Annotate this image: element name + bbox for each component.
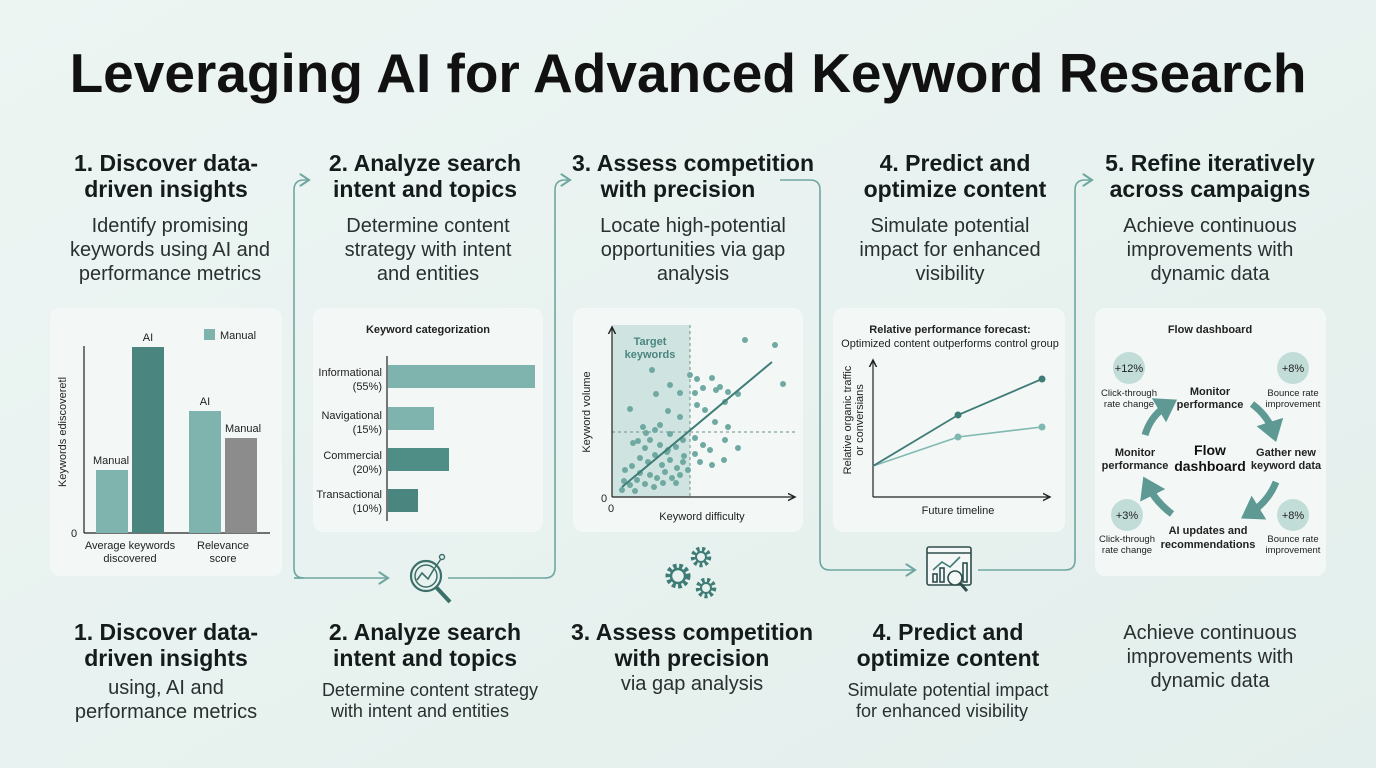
bottom text 5: Achieve continuous [1123, 622, 1297, 644]
bottom text 4: 4. Predict and [873, 619, 1023, 645]
panel: forecast line chart: Future timeline [922, 505, 994, 517]
step 1 heading: performance metrics [79, 263, 261, 285]
step 3 heading: Locate high-potential [600, 215, 786, 237]
step 1 heading [70, 150, 270, 285]
icon: magnifier with chart [411, 554, 450, 602]
bottom text 4: optimize content [857, 645, 1040, 671]
step 5 heading: Achieve continuous [1123, 215, 1297, 237]
step 3 heading: opportunities via gap [601, 239, 785, 261]
panel: keyword categorization: Navigational [321, 410, 382, 422]
panel: flow dashboard: recommendations [1161, 539, 1255, 551]
step 4 heading: impact for enhanced [859, 239, 1041, 261]
step 2 heading: and entities [377, 263, 479, 285]
panel: flow dashboard: improvement [1266, 399, 1321, 410]
step 2 heading: Determine content [346, 215, 510, 237]
bottom text 5: dynamic data [1151, 670, 1270, 692]
step 4 heading: Simulate potential [871, 215, 1029, 237]
panel: bar chart AI vs manual: Manual [220, 330, 256, 342]
panel: flow dashboard: +12% [1115, 363, 1143, 375]
panel: scatter plot: Keyword volume [581, 371, 593, 453]
panel: flow dashboard: Monitor [1190, 386, 1231, 398]
panel: forecast line chart: Optimized content outperforms control group [841, 338, 1059, 350]
step 2 heading: intent and topics [333, 176, 517, 202]
bottom text 1: performance metrics [75, 701, 257, 723]
panel: bar chart AI vs manual: AI [200, 396, 210, 408]
bottom text 3: with precision [614, 645, 769, 671]
panel: flow dashboard: keyword data [1251, 460, 1322, 472]
panel: keyword categorization: Keyword categorization [366, 324, 490, 336]
panel: keyword categorization: (15%) [353, 424, 382, 436]
panel: flow dashboard: +8% [1282, 510, 1304, 522]
bottom text 1: using, AI and [108, 677, 224, 699]
step 1 heading: Identify promising [92, 215, 248, 237]
panel: forecast line chart [833, 308, 1065, 532]
panel: bar chart AI vs manual: Relevance [197, 540, 249, 552]
step 4 heading [859, 150, 1047, 285]
panel: keyword categorization [313, 308, 543, 532]
panel: scatter plot: Target [634, 336, 667, 348]
step 2 heading: strategy with intent [345, 239, 512, 261]
panel: flow dashboard: Click-through [1099, 534, 1155, 545]
panel: flow dashboard: Gather new [1256, 447, 1316, 459]
panel: flow dashboard: dashboard [1174, 458, 1246, 474]
icon: gears [668, 549, 714, 596]
icon: dashboard with magnifier [927, 547, 971, 591]
bottom text 5: improvements with [1127, 646, 1293, 668]
step 1 heading: 1. Discover data- [74, 150, 258, 176]
bottom text 4: for enhanced visibility [856, 701, 1028, 721]
step 4 heading: optimize content [864, 176, 1047, 202]
panel: forecast line chart: Relative performance forecast: [869, 324, 1031, 336]
bottom text 4 [847, 619, 1049, 721]
bottom text 2: with intent and entities [330, 701, 509, 721]
panel: flow dashboard: Click-through [1101, 388, 1157, 399]
bottom text 3: 3. Assess competition [571, 619, 813, 645]
panel: forecast line chart: Relative organic traffic [842, 365, 854, 474]
panel: flow dashboard: rate change [1102, 545, 1152, 556]
bottom text 2: 2. Analyze search [329, 619, 521, 645]
panel: flow dashboard: performance [1102, 460, 1168, 472]
bottom text 5 [1123, 622, 1297, 692]
panel: flow dashboard: Monitor [1115, 447, 1156, 459]
panel: bar chart AI vs manual: Average keywords [85, 540, 176, 552]
bottom text 2: Determine content strategy [322, 680, 538, 700]
step 5 heading: dynamic data [1151, 263, 1270, 285]
bottom text 4: Simulate potential impact [847, 680, 1049, 700]
panel: flow dashboard: Flow [1194, 442, 1226, 458]
panel: keyword categorization: (10%) [353, 503, 382, 515]
step 5 heading [1105, 150, 1315, 285]
bottom text 2 [322, 619, 538, 721]
panel: keyword categorization: (55%) [353, 381, 382, 393]
panel: scatter plot: 0 [601, 493, 607, 505]
panel: keyword categorization: Informational [318, 367, 382, 379]
panel: flow dashboard: AI updates and [1169, 525, 1247, 537]
panel: scatter plot: keywords [625, 349, 675, 361]
panel: bar chart AI vs manual: discovered [103, 553, 157, 565]
panel: scatter plot [573, 308, 803, 532]
panel: bar chart AI vs manual: Manual [225, 423, 261, 435]
panel: bar chart AI vs manual: Keywords ediscoveretl [57, 377, 69, 487]
step 2 heading: 2. Analyze search [329, 150, 521, 176]
panel: keyword categorization: (20%) [353, 464, 382, 476]
panel: scatter plot: Keyword difficulty [659, 511, 745, 523]
step 3 heading: 3. Assess competition [572, 150, 814, 176]
panel: keyword categorization: Transactional [316, 489, 382, 501]
panel: flow dashboard: rate change [1104, 399, 1154, 410]
panel: bar chart AI vs manual: score [210, 553, 236, 565]
step 5 heading: 5. Refine iteratively [1105, 150, 1315, 176]
step 4 heading: visibility [916, 263, 984, 285]
bottom text 3 [571, 619, 813, 695]
step 1 heading: keywords using AI and [70, 239, 270, 261]
panel: flow dashboard: Flow dashboard [1168, 324, 1252, 336]
panel: flow dashboard: Bounce rate [1267, 388, 1319, 399]
panel: flow dashboard: Bounce rate [1267, 534, 1319, 545]
bottom text 1 [74, 619, 258, 723]
panel: flow dashboard: +8% [1282, 363, 1304, 375]
step 2 heading [329, 150, 521, 285]
bottom text 2: intent and topics [333, 645, 517, 671]
step 3 heading: analysis [657, 263, 729, 285]
panel: keyword categorization: Commercial [323, 450, 382, 462]
panel: scatter plot: 0 [608, 503, 614, 515]
panel: forecast line chart: or conversians [854, 384, 866, 456]
connector arrows [294, 180, 1092, 578]
step 1 heading: driven insights [84, 176, 248, 202]
step 5 heading: improvements with [1127, 239, 1293, 261]
step 3 heading: with precision [600, 176, 755, 202]
bottom text 1: driven insights [84, 645, 248, 671]
panel: flow dashboard: improvement [1266, 545, 1321, 556]
panel: bar chart AI vs manual: AI [143, 332, 153, 344]
title: Leveraging AI for Advanced Keyword Research [70, 42, 1306, 104]
panel: flow dashboard: +3% [1116, 510, 1138, 522]
panel: flow dashboard: performance [1177, 399, 1243, 411]
bottom text 3: via gap analysis [621, 673, 763, 695]
step 5 heading: across campaigns [1110, 176, 1310, 202]
step 3 heading [572, 150, 814, 285]
step 4 heading: 4. Predict and [880, 150, 1030, 176]
bottom text 1: 1. Discover data- [74, 619, 258, 645]
panel: bar chart AI vs manual: 0 [71, 528, 77, 540]
panel: bar chart AI vs manual: Manual [93, 455, 129, 467]
panel: flow dashboard [1095, 308, 1326, 576]
panel: bar chart AI vs manual [50, 308, 282, 576]
